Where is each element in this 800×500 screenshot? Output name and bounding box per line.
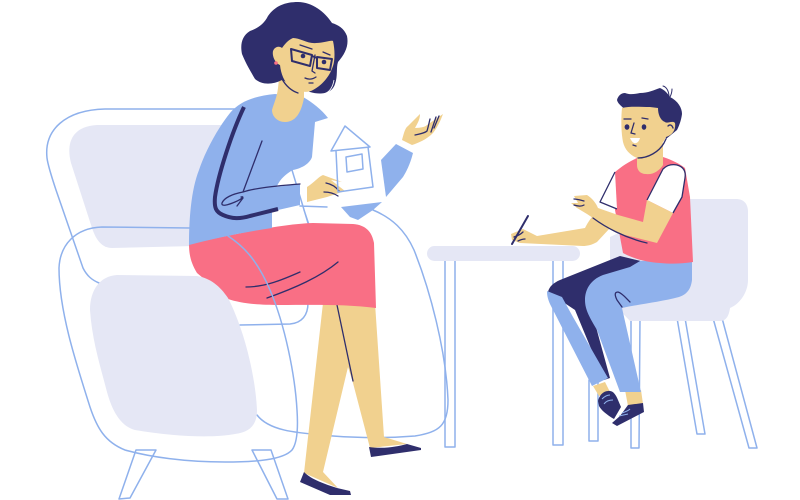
therapist raised sleeve: [381, 144, 413, 197]
therapist jaw line: [282, 79, 298, 93]
therapist hand holding house: [307, 175, 345, 202]
boy jaw line: [638, 139, 666, 158]
therapist shoes: [300, 444, 421, 495]
therapist glasses: [291, 49, 332, 70]
boy pink vest: [615, 157, 693, 264]
boy near foot: [625, 390, 643, 406]
boy sleeves: [600, 165, 685, 213]
therapist earring: [274, 61, 278, 65]
far shoe stripes: [602, 395, 613, 404]
therapist hair: [241, 2, 348, 93]
boy far leg: [548, 256, 645, 380]
therapist sweater: [189, 94, 328, 245]
writing hand lines: [514, 232, 525, 241]
table: [427, 246, 580, 447]
therapist eyes: [301, 54, 326, 64]
table legs: [445, 258, 455, 447]
house drawing: [331, 126, 373, 192]
boy far shoe: [598, 391, 621, 419]
therapist forearm sleeve: [235, 184, 300, 218]
chair legs: [589, 380, 598, 441]
therapist face: [273, 38, 334, 92]
raised hand finger lines: [415, 116, 439, 135]
hair strand right: [324, 80, 334, 94]
boy's chair: [589, 199, 757, 448]
boy smile: [630, 138, 640, 143]
table top: [427, 246, 580, 261]
chair seat and back: [610, 199, 748, 321]
boy: [511, 86, 693, 426]
therapist sleeve lines: [215, 107, 300, 218]
therapist lower sleeve: [341, 202, 382, 220]
therapist legs: [304, 303, 407, 488]
armchair back: [47, 109, 448, 438]
armchair seat cushion: [90, 275, 257, 436]
therapist finger lines: [324, 183, 339, 196]
therapist brows, nose and mouth: [300, 45, 330, 83]
raised arm line: [593, 218, 647, 243]
white hair strand: [249, 8, 273, 29]
boy face: [621, 107, 675, 158]
armchair front outline: [59, 227, 297, 462]
hand lines: [574, 199, 584, 206]
therapist neck: [272, 70, 304, 122]
boy writing arm: [511, 212, 610, 246]
therapist skirt: [189, 223, 376, 308]
boy knee line: [615, 292, 630, 307]
boy neck: [637, 143, 663, 174]
boy near leg: [585, 258, 692, 392]
pencil: [512, 216, 528, 244]
boy near shoe: [612, 403, 644, 426]
boy brows and nose: [624, 118, 648, 146]
boy hair: [617, 88, 682, 139]
boy far foot: [593, 382, 610, 396]
skirt folds: [246, 262, 338, 298]
near shoe stripes: [619, 409, 630, 416]
therapist leg line: [337, 305, 353, 381]
boy ear line: [668, 125, 673, 128]
armchair legs: [119, 450, 288, 499]
hair curl: [663, 86, 672, 97]
boy raised arm: [571, 195, 673, 243]
therapist raised hand: [402, 114, 443, 145]
boy eyes: [625, 124, 646, 130]
therapist: [189, 2, 443, 495]
